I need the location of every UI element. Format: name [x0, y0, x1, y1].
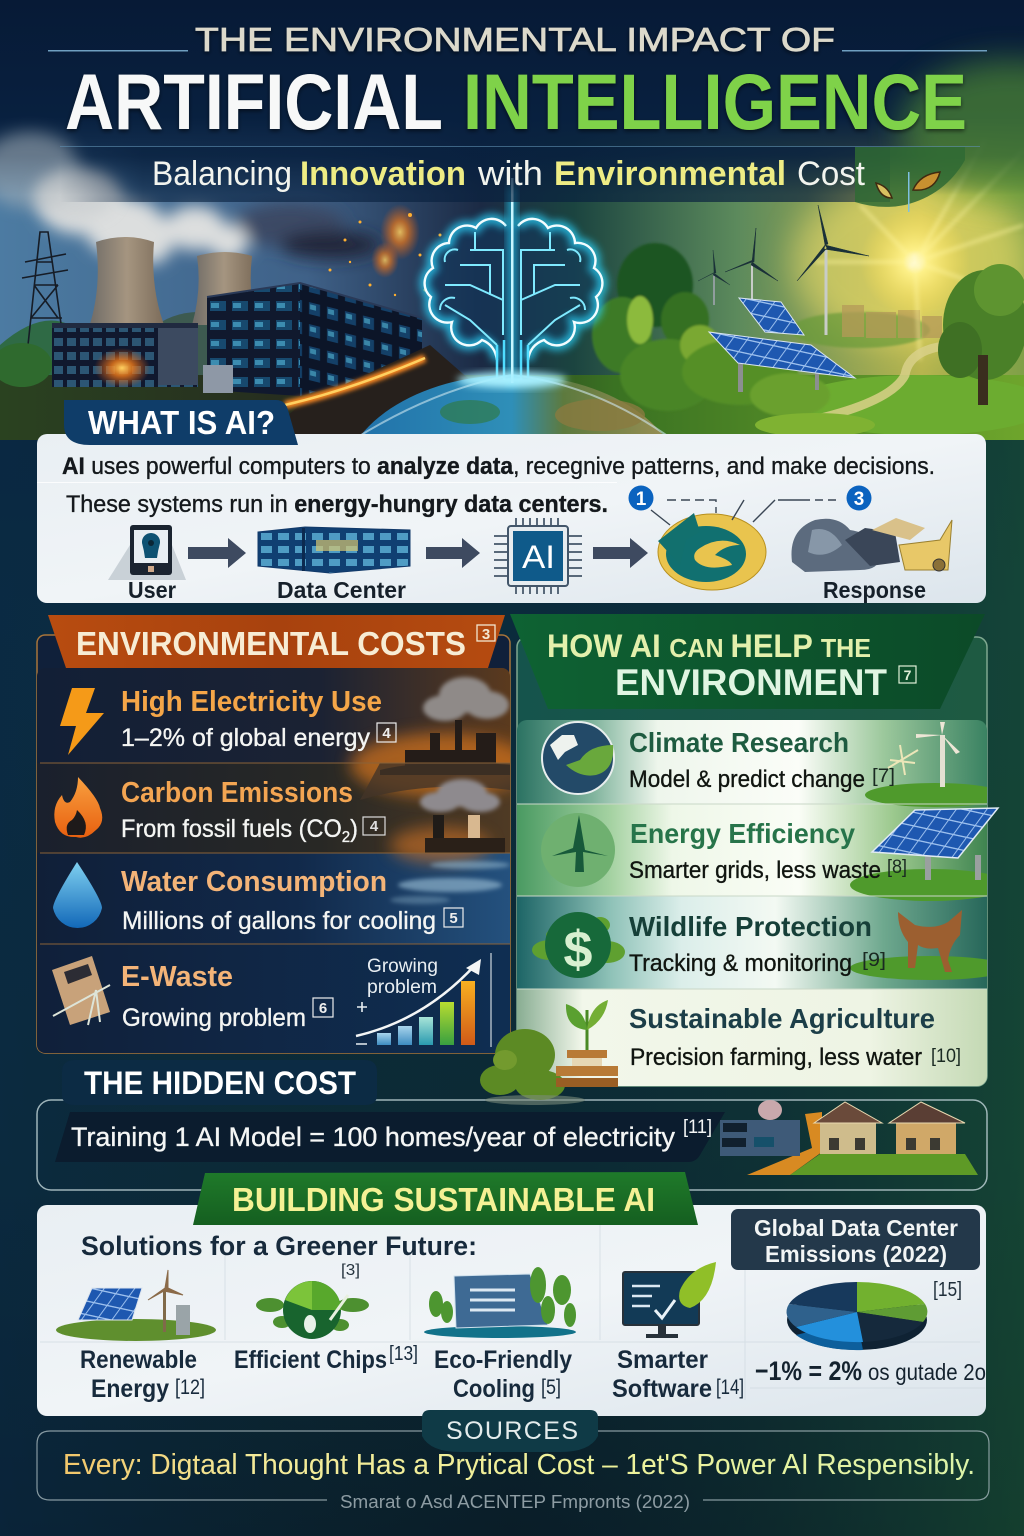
arrow: user to data center: [188, 538, 246, 568]
labels: solutions: [14]: [716, 1376, 744, 1399]
icon: eco-friendly cooling: [424, 1267, 576, 1338]
panel: how AI can help the environment: [510, 614, 1010, 1086]
label: data center: Data Center: [277, 577, 406, 603]
ribbon heading: how AI can help: HOW AI CAN HELP THE: [547, 628, 871, 664]
scene: smog city: [350, 677, 530, 800]
smoke clouds: [36, 166, 380, 264]
strip: training comparison: [11]: [683, 1117, 712, 1138]
wind turbines: [698, 205, 869, 335]
row: energy efficiency: [8]: [887, 857, 907, 878]
text: AI description: AI uses powerful computers to analyze data, recegnive patterns, and make decisions.: [62, 453, 935, 480]
power pylon: [22, 232, 68, 345]
label: response: Response: [823, 577, 926, 603]
row: wildlife protection: [9]: [862, 950, 886, 971]
row: sustainable agriculture: [10]: [931, 1046, 961, 1067]
panel: environmental costs: [37, 615, 530, 1053]
ribbon heading: environmental costs: ENVIRONMENTAL COSTS: [76, 625, 466, 662]
row: high electricity use: 1–2% of global energy: [121, 724, 370, 752]
row dividers: [517, 804, 987, 989]
row: climate research: Climate Research: [629, 727, 849, 758]
row dividers: [40, 763, 510, 944]
help rows backgrounds and scenes: [517, 720, 1010, 1086]
tab: what is AI heading: [64, 400, 298, 445]
strip: training comparison: Training 1 AI Model = 100 homes/year of electricity: [71, 1122, 675, 1152]
subtitle: with: [477, 155, 543, 193]
panel: building sustainable AI solutions: [37, 1205, 986, 1416]
chart: growing e-waste bars: Growing: [367, 956, 438, 977]
row: climate research: [542, 722, 895, 794]
icon: foliage and sprout: [480, 1000, 618, 1105]
icon: renewable energy: [56, 1270, 216, 1341]
row: energy efficiency: Energy Efficiency: [630, 818, 855, 849]
fire and sparks: [285, 204, 470, 440]
solar panels: [709, 298, 855, 392]
ribbon heading: environmental costs: [48, 615, 505, 668]
strip: training comparison: [55, 1112, 725, 1162]
ground: [0, 343, 1024, 445]
winding road and right tree: [755, 264, 1024, 437]
row: carbon emissions: 2: [342, 829, 350, 846]
emissions chart title: [731, 1209, 980, 1270]
row: carbon emissions: From fossil fuels (CO: [121, 815, 356, 843]
arrow: data center to AI chip: [426, 538, 480, 568]
emissions chart title: Global Data Center: [754, 1215, 958, 1241]
arrow: AI chip to swirl: [593, 538, 648, 568]
icon: AI chip: AI: [522, 539, 555, 575]
labels: solutions: Cooling: [453, 1375, 535, 1403]
row: water consumption: [53, 862, 463, 935]
labels: solutions: [80, 1343, 744, 1403]
distant city: [842, 305, 942, 338]
row: e-waste: Growing problem: [122, 1004, 306, 1032]
text: emissions share: [755, 1356, 986, 1386]
cooling towers: [88, 237, 256, 330]
panel: what is AI: [37, 400, 986, 603]
row: energy efficiency: [541, 808, 998, 887]
row: wildlife protection: [532, 911, 886, 979]
row: sustainable agriculture: Precision farming, less water: [630, 1044, 922, 1071]
chart: growing e-waste bars: problem: [367, 977, 437, 998]
cost rows backgrounds and scenes: [37, 668, 530, 1053]
row: high electricity use: High Electricity Use: [121, 686, 382, 718]
data center building: [52, 283, 422, 396]
scene: smokestack: [390, 779, 505, 863]
icon: user phone: [108, 525, 186, 580]
emissions chart title: Emissions (2022): [765, 1241, 947, 1267]
text: AI description: [62, 453, 935, 518]
labels: solutions: [5]: [541, 1376, 561, 1399]
labels: solutions: Software: [612, 1375, 712, 1403]
row: e-waste: E-Waste: [121, 961, 233, 993]
text: emissions share: os gutade 2o: [868, 1359, 986, 1385]
connector lines and number badges: 3: [854, 489, 864, 510]
row: carbon emissions: ): [350, 815, 358, 843]
sun: [814, 173, 1024, 361]
pie chart: global data center emissions: [787, 1282, 927, 1350]
panel: the hidden cost: [37, 1060, 987, 1190]
ribbon heading: how AI can help: 7: [904, 667, 912, 683]
title: THE ENVIRONMENTAL IMPACT OF: [195, 21, 835, 58]
icon: efficient chips: [256, 1281, 369, 1339]
connector lines and number badges: [628, 486, 872, 525]
icon: globe with leaf: [542, 722, 614, 794]
text: closing line: Every: Digtaal Thought Has a Prytical Cost – 1et'S Power AI Respensibly.: [63, 1449, 975, 1481]
icon: dollar with foliage: [532, 912, 625, 979]
icon: swirl processing symbol: [658, 513, 766, 590]
icon: AI chip: [494, 518, 582, 594]
icon: discarded device: [52, 956, 110, 1025]
icon: rocks and waste bin: [791, 518, 952, 572]
row: carbon emissions: [54, 777, 385, 846]
scene: rough water: [390, 861, 510, 904]
earth globe: [361, 374, 666, 434]
row: e-waste: 6: [319, 1000, 327, 1017]
heading tab: sources: SOURCES: [446, 1417, 578, 1445]
text: footer credit: Smarat o Asd ACENTEP Fmpronts (2022): [340, 1492, 690, 1512]
labels: solutions: Energy: [91, 1375, 169, 1403]
subtitle: Environmental: [554, 155, 786, 193]
tab: hidden cost heading: THE HIDDEN COST: [84, 1065, 356, 1101]
row: water consumption: 5: [449, 910, 458, 927]
ribbon heading: how AI can help: [510, 614, 985, 709]
icon: data center: [258, 527, 410, 573]
row: wildlife protection: Tracking & monitoring: [629, 950, 852, 977]
icon: dollar with foliage: $: [564, 921, 593, 979]
labels: solutions: [13]: [389, 1343, 418, 1365]
icon: leaf pair: [876, 172, 940, 212]
row: energy efficiency: Smarter grids, less waste: [629, 857, 881, 884]
text: AI description: These systems run in energy-hungry data centers.: [66, 491, 608, 518]
icon: lightning bolt: [60, 688, 104, 755]
tab: what is AI heading: WHAT IS AI?: [88, 404, 275, 441]
connector lines and number badges: 1: [636, 489, 647, 510]
title: [48, 21, 987, 147]
ribbon heading: how AI can help: ENVIRONMENT: [615, 662, 887, 703]
scene: turbines on grass: [865, 722, 987, 807]
text: solutions heading: Solutions for a Greener Future:: [81, 1231, 477, 1261]
scene: solar panel on grass: [850, 855, 987, 901]
labels: solutions: [12]: [175, 1376, 205, 1399]
icon: solar panel: [872, 808, 998, 858]
title: ARTIFICIAL: [65, 57, 443, 146]
row: sustainable agriculture: [629, 1003, 961, 1071]
subtitle: Innovation: [300, 155, 466, 193]
panel: closing message: [37, 1431, 989, 1512]
glowing circuit brain: [425, 178, 602, 388]
icon: smarter software: [623, 1262, 716, 1338]
ribbon heading: environmental costs: 3: [482, 626, 490, 643]
row: climate research: Model & predict change: [629, 766, 865, 793]
row: high electricity use: 4: [382, 725, 391, 742]
row: e-waste: [52, 953, 491, 1047]
label: user: User: [128, 577, 176, 603]
header backdrop: [0, 0, 1024, 219]
scene: animal on grass: [850, 910, 987, 980]
distant hills: [0, 312, 207, 375]
row: water consumption: Water Consumption: [121, 866, 387, 898]
icon: data center and homes: [720, 1100, 978, 1175]
labels: solutions: Efficient Chips: [234, 1346, 387, 1374]
subtitle: [152, 155, 866, 193]
row: carbon emissions: 4: [370, 818, 379, 835]
text: reference 15: [15]: [933, 1279, 962, 1301]
row: water consumption: Millions of gallons for cooling: [122, 907, 436, 935]
labels: solutions: Renewable: [80, 1346, 197, 1374]
icon: wind turbine in green disc: [541, 813, 615, 887]
green hills, bushes and trees: [592, 243, 930, 417]
subtitle: Cost: [797, 155, 866, 193]
labels: solutions: Smarter: [617, 1346, 708, 1374]
row: climate research: [7]: [872, 766, 895, 787]
row: sustainable agriculture: Sustainable Agriculture: [629, 1003, 935, 1034]
labels: solutions: Eco-Friendly: [434, 1346, 572, 1374]
text: reference 3: [3]: [341, 1262, 360, 1279]
hero illustration: fossil industry versus green energy around glowing brain: [0, 128, 1024, 440]
row: high electricity use: [60, 686, 396, 755]
text: emissions share: −1% = 2%: [755, 1356, 862, 1386]
subtitle: Balancing: [152, 155, 292, 193]
heading tab: building sustainable AI: BUILDING SUSTAINABLE AI: [232, 1181, 655, 1218]
heading tab: building sustainable AI: [193, 1172, 698, 1225]
row: carbon emissions: Carbon Emissions: [121, 777, 353, 809]
icon: water drop: [53, 862, 102, 928]
row: wildlife protection: Wildlife Protection: [629, 911, 872, 942]
heading tab: sources: [422, 1410, 598, 1452]
icon: flame: [54, 777, 102, 838]
chart: growing e-waste bars: [356, 953, 491, 1047]
